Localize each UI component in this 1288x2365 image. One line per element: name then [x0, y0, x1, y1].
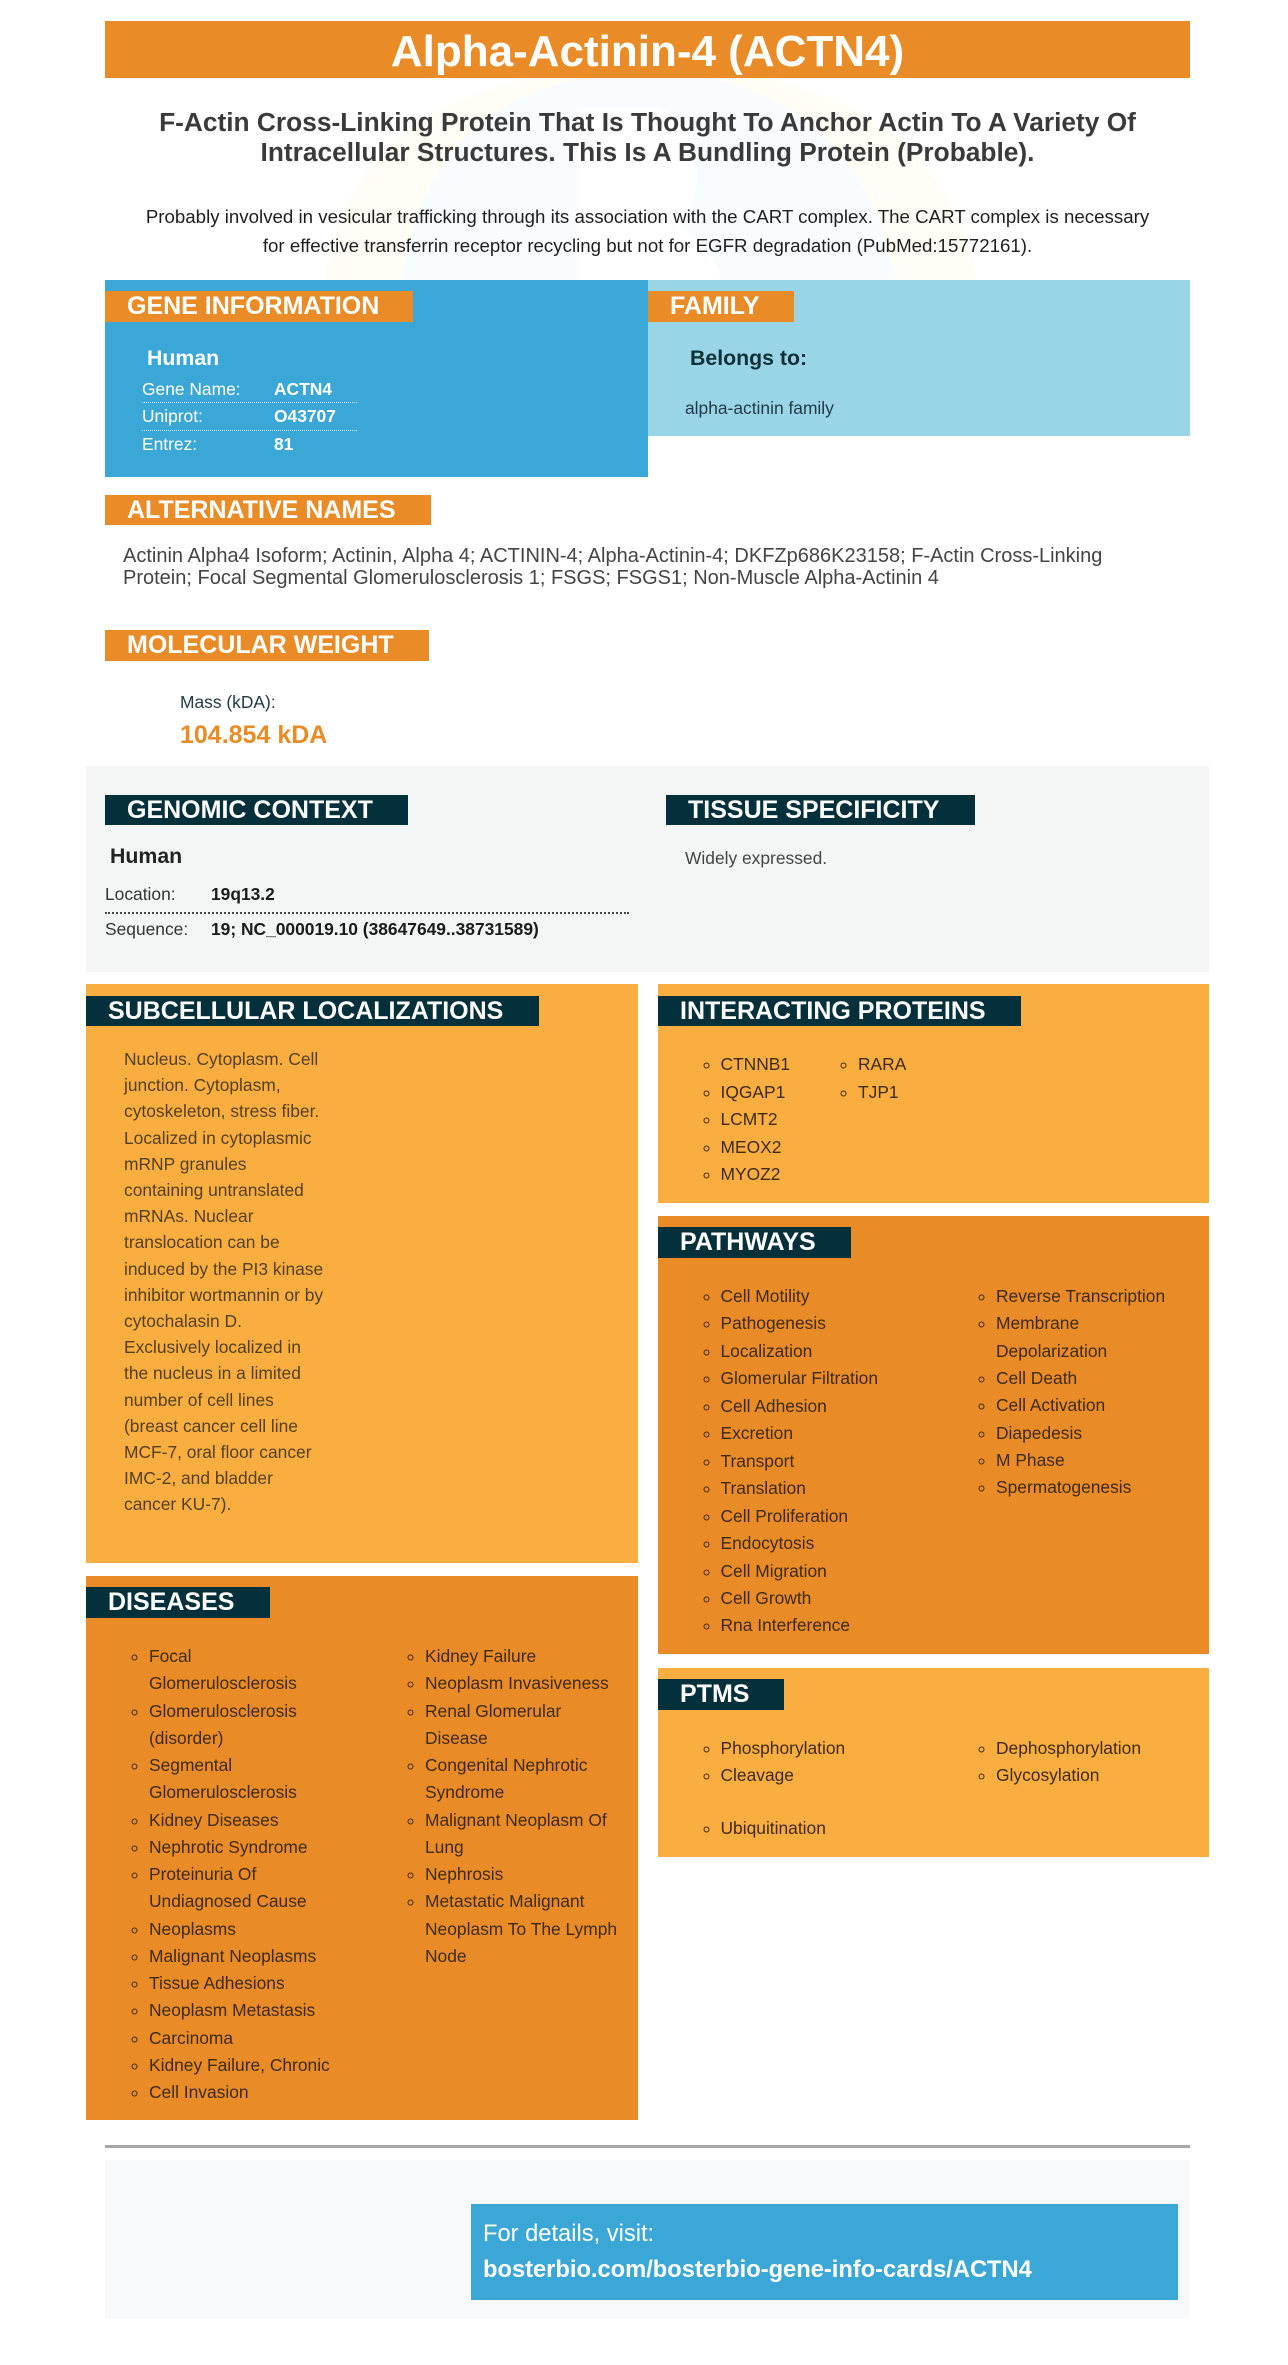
ptms list column 2: [978, 1738, 1141, 1785]
diseases list column 1: Kidney Diseases: [149, 1810, 279, 1830]
heading: diseases: [86, 1587, 270, 1618]
diseases list column 1: Kidney Failure, Chronic: [149, 2055, 330, 2075]
species label: Human: [147, 346, 219, 370]
subtitle: Intracellular Structures. This Is A Bundling Protein (Probable).: [261, 136, 1034, 166]
pathways list column 2: Diapedesis: [996, 1423, 1082, 1443]
ptms list column 1: Ubiquitination: [720, 1818, 826, 1838]
pathways list column 1: Excretion: [720, 1423, 793, 1443]
subtitle: F-Actin Cross-Linking Protein That Is Thought To Anchor Actin To A Variety Of: [159, 107, 1136, 137]
subcellular text: the nucleus in a limited: [124, 1363, 301, 1383]
subcellular text: cancer KU-7).: [124, 1494, 231, 1514]
interacting list column 1: MEOX2: [720, 1136, 781, 1156]
diseases list column 2: Disease: [425, 1728, 488, 1748]
interacting list column 1: CTNNB1: [720, 1054, 790, 1074]
subcellular text: (breast cancer cell line: [124, 1416, 298, 1436]
diseases list column 2: Neoplasm To The Lymph: [425, 1918, 617, 1938]
family value: alpha-actinin family: [685, 398, 834, 418]
location row: [105, 883, 629, 914]
pathways list column 1: [704, 1286, 878, 1635]
gene name row: Gene Name:: [142, 379, 241, 399]
panel: footer: [105, 2160, 1190, 2319]
watermark logo: [324, 78, 976, 280]
diseases list column 2: Kidney Failure: [425, 1646, 536, 1666]
interacting list column 1: [704, 1054, 790, 1184]
diseases list column 1: Neoplasm Metastasis: [149, 2000, 315, 2020]
tissue specificity text: Widely expressed.: [685, 848, 827, 868]
ptms list column 1: Phosphorylation: [720, 1738, 845, 1758]
title banner: [105, 21, 1190, 78]
pathways list column 2: Spermatogenesis: [996, 1477, 1131, 1497]
ptms list column 2: Glycosylation: [996, 1765, 1099, 1785]
subcellular text: number of cell lines: [124, 1390, 274, 1410]
pathways list column 1: Pathogenesis: [720, 1313, 826, 1333]
description: for effective transferrin receptor recycling but not for EGFR degradation (PubMed:15772161).: [263, 235, 1032, 256]
diseases list column 1: Glomerulosclerosis: [149, 1673, 297, 1693]
diseases list column 1: Malignant Neoplasms: [149, 1946, 316, 1966]
heading: ptms: PTMS: [680, 1680, 749, 1708]
pathways list column 1: Transport: [720, 1451, 794, 1471]
diseases list column 1: Cell Invasion: [149, 2082, 249, 2102]
panel: ptms: [658, 1668, 1209, 1857]
heading: subcellular localizations: SUBCELLULAR LOCALIZATIONS: [108, 997, 503, 1025]
diseases list column 1: Proteinuria Of: [149, 1864, 256, 1884]
ptms list column 2: Dephosphorylation: [996, 1738, 1141, 1758]
heading: family: FAMILY: [670, 292, 759, 320]
pathways list column 2: Cell Activation: [996, 1395, 1105, 1415]
location row: 19q13.2: [211, 884, 275, 904]
ptms list column 1: [704, 1738, 845, 1838]
heading: alternative names: ALTERNATIVE NAMES: [127, 496, 396, 524]
heading: gene information: GENE INFORMATION: [127, 292, 379, 320]
panel: genomic context and tissue specificity: [86, 766, 1209, 972]
diseases list column 2: Node: [425, 1946, 467, 1966]
diseases list column 2: Renal Glomerular: [425, 1700, 561, 1720]
entrez row: 81: [274, 434, 293, 454]
uniprot row: Uniprot:: [142, 406, 203, 426]
ptms list column 1: Cleavage: [720, 1765, 794, 1785]
pathways list column 1: Glomerular Filtration: [720, 1368, 878, 1388]
interacting list column 2: [840, 1054, 906, 1102]
diseases list column 1: [132, 1646, 330, 2102]
description: Probably involved in vesicular trafficking through its association with the CART complex. The CART complex is necessary: [146, 206, 1149, 227]
gene name row: ACTN4: [274, 379, 332, 399]
pathways list column 2: [978, 1286, 1165, 1497]
diseases list column 1: Carcinoma: [149, 2028, 233, 2048]
mass label: Mass (kDA):: [180, 692, 276, 712]
heading: genomic context: GENOMIC CONTEXT: [127, 796, 373, 824]
panel: family: [648, 280, 1190, 436]
entrez row: Entrez:: [142, 434, 197, 454]
pathways list column 2: Reverse Transcription: [996, 1286, 1165, 1306]
pathways list column 1: Cell Migration: [720, 1561, 827, 1581]
uniprot row: [142, 405, 357, 431]
subcellular text: containing untranslated: [124, 1180, 304, 1200]
diseases list column 1: Focal: [149, 1646, 192, 1666]
panel: diseases: [86, 1576, 638, 2120]
heading: pathways: PATHWAYS: [680, 1228, 816, 1256]
subcellular text: cytochalasin D.: [124, 1311, 242, 1331]
pathways list column 2: Depolarization: [996, 1341, 1107, 1361]
footer rule: [105, 2145, 1190, 2148]
alternative names text: Protein; Focal Segmental Glomerulosclerosis 1; FSGS; FSGS1; Non-Muscle Alpha-Actinin 4: [123, 567, 939, 589]
details url: bosterbio.com/bosterbio-gene-info-cards/ACTN4: [483, 2257, 1032, 2283]
subcellular text: induced by the PI3 kinase: [124, 1259, 323, 1279]
subtitle: [159, 107, 1136, 166]
heading: interacting proteins: INTERACTING PROTEINS: [680, 997, 986, 1025]
interacting list column 1: IQGAP1: [720, 1082, 785, 1102]
subcellular text: mRNAs. Nuclear: [124, 1206, 254, 1226]
interacting list column 1: LCMT2: [720, 1109, 778, 1129]
heading: diseases: DISEASES: [108, 1588, 234, 1616]
interacting list column 1: MYOZ2: [720, 1164, 780, 1184]
diseases list column 1: Glomerulosclerosis: [149, 1782, 297, 1802]
diseases list column 2: Syndrome: [425, 1782, 504, 1802]
subcellular text: junction. Cytoplasm,: [124, 1075, 281, 1095]
entrez row: [142, 434, 293, 454]
diseases list column 2: [408, 1646, 617, 1966]
subcellular text: MCF-7, oral floor cancer: [124, 1442, 311, 1462]
sequence row: 19; NC_000019.10 (38647649..38731589): [211, 919, 539, 939]
mass value: 104.854 kDA: [180, 721, 327, 749]
panel: gene information: [105, 280, 648, 477]
heading: ptms: [658, 1679, 784, 1710]
diseases list column 1: Nephrotic Syndrome: [149, 1837, 308, 1857]
diseases list column 1: Segmental: [149, 1755, 232, 1775]
description: [146, 206, 1150, 256]
subcellular text: IMC-2, and bladder: [124, 1468, 273, 1488]
subcellular text: mRNP granules: [124, 1154, 246, 1174]
pathways list column 1: Cell Proliferation: [720, 1506, 848, 1526]
diseases list column 1: (disorder): [149, 1728, 223, 1748]
diseases list column 2: Metastatic Malignant: [425, 1891, 584, 1911]
pathways list column 1: Cell Adhesion: [720, 1396, 827, 1416]
callout: details link: [471, 2204, 1178, 2300]
belongs to label: Belongs to:: [690, 346, 807, 370]
subcellular text: Exclusively localized in: [124, 1337, 301, 1357]
heading: tissue specificity: TISSUE SPECIFICITY: [688, 796, 939, 824]
sequence row: Sequence:: [105, 919, 188, 939]
location row: Location:: [105, 884, 176, 904]
diseases list column 1: Undiagnosed Cause: [149, 1891, 307, 1911]
pathways list column 2: Membrane: [996, 1313, 1079, 1333]
subcellular text: Nucleus. Cytoplasm. Cell: [124, 1049, 318, 1069]
interacting list column 2: TJP1: [858, 1082, 899, 1102]
diseases list column 1: Tissue Adhesions: [149, 1973, 285, 1993]
subcellular text: [124, 1049, 323, 1514]
diseases list column 2: Neoplasm Invasiveness: [425, 1673, 609, 1693]
heading: pathways: [658, 1227, 851, 1258]
panel: subcellular localizations: [86, 984, 638, 1563]
diseases list column 2: Lung: [425, 1837, 464, 1857]
panel: interacting proteins: [658, 984, 1209, 1203]
heading: molecular weight: MOLECULAR WEIGHT: [127, 631, 394, 659]
pathways list column 1: Rna Interference: [720, 1615, 850, 1635]
panel: pathways: [658, 1216, 1209, 1654]
interacting list column 2: RARA: [858, 1054, 906, 1074]
subcellular text: translocation can be: [124, 1232, 280, 1252]
alternative names text: Actinin Alpha4 Isoform; Actinin, Alpha 4; ACTININ-4; Alpha-Actinin-4; DKFZp686K23158; F-Actin Cross-Linking: [123, 545, 1102, 567]
pathways list column 1: Endocytosis: [720, 1533, 814, 1553]
details label: For details, visit:: [483, 2221, 654, 2247]
gene name row: [142, 378, 357, 403]
diseases list column 1: Neoplasms: [149, 1918, 236, 1938]
molecular weight value: [180, 692, 327, 749]
pathways list column 1: Localization: [720, 1341, 812, 1361]
pathways list column 1: Cell Motility: [720, 1286, 809, 1306]
pathways list column 1: Cell Growth: [720, 1588, 811, 1608]
pathways list column 2: M Phase: [996, 1450, 1065, 1470]
pathways list column 2: Cell Death: [996, 1368, 1077, 1388]
subcellular text: inhibitor wortmannin or by: [124, 1285, 323, 1305]
subcellular text: Localized in cytoplasmic: [124, 1128, 312, 1148]
genomic species label: Human: [110, 844, 182, 868]
diseases list column 2: Nephrosis: [425, 1864, 503, 1884]
title banner: Alpha-Actinin-4 (ACTN4): [391, 27, 904, 76]
diseases list column 2: Malignant Neoplasm Of: [425, 1810, 607, 1830]
diseases list column 2: Congenital Nephrotic: [425, 1755, 587, 1775]
subcellular text: cytoskeleton, stress fiber.: [124, 1101, 319, 1121]
heading: family: [648, 291, 794, 322]
pathways list column 1: Translation: [720, 1478, 806, 1498]
uniprot row: O43707: [274, 406, 336, 426]
alternative names text: [123, 545, 1102, 589]
diseases list column 1: Glomerulosclerosis: [149, 1700, 297, 1720]
